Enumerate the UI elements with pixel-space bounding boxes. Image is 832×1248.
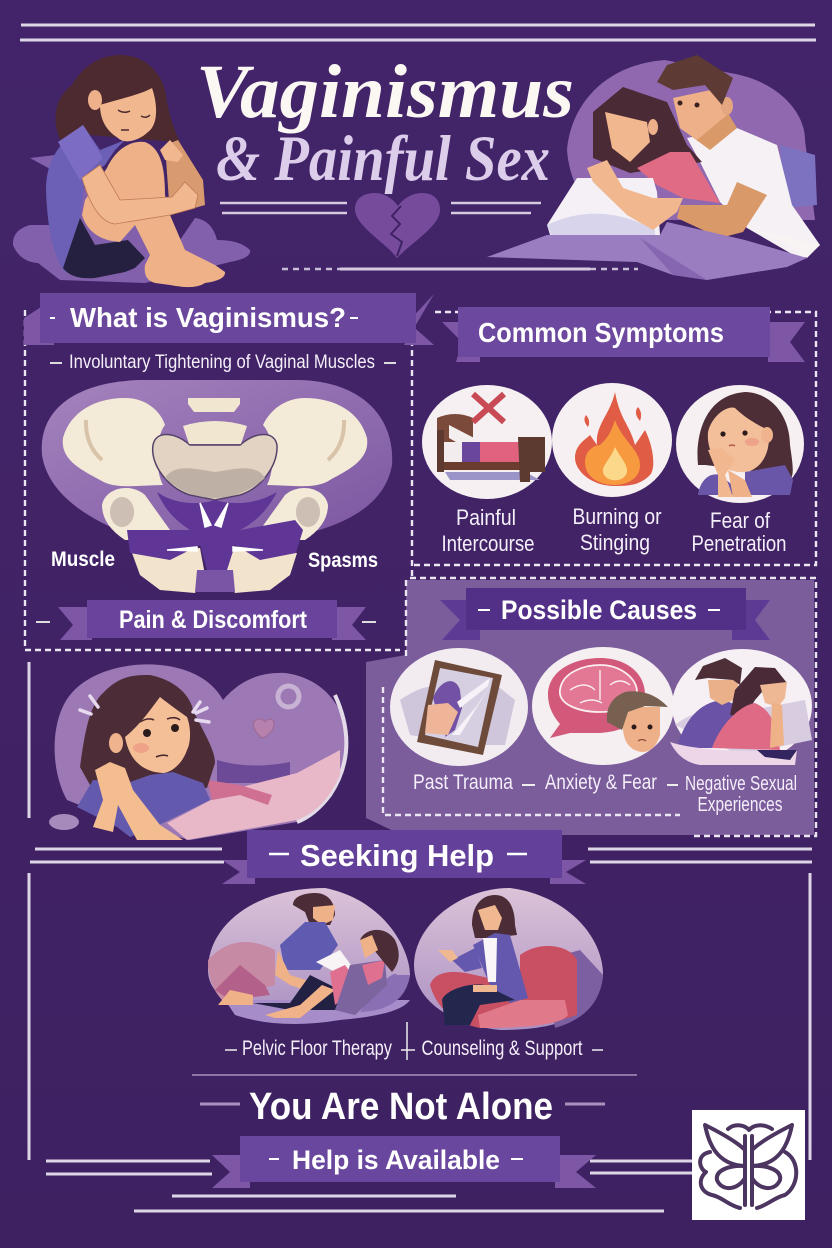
cause labels: Experiences	[698, 794, 782, 816]
ribbon: pain and discomfort	[36, 600, 376, 640]
subheading: Involuntary Tightening of Vaginal Muscles	[69, 352, 375, 373]
illustration: pelvis with muscle spasms	[42, 380, 392, 593]
cause: past trauma	[390, 648, 528, 766]
illustration: sad woman hugging knees	[13, 55, 250, 287]
ribbon: seeking help: Seeking Help	[300, 838, 494, 873]
illustration: couple in bed	[487, 55, 820, 280]
title side rules	[220, 203, 541, 213]
panel: possible causes	[366, 578, 816, 836]
ribbon: help is available: Help is Available	[292, 1145, 500, 1175]
ribbon: what is vaginismus	[24, 293, 434, 345]
dashed rule under header	[282, 268, 340, 270]
title: Vaginismus	[196, 50, 574, 134]
side rails	[29, 662, 810, 1160]
label: pelvic floor therapy	[225, 1022, 415, 1060]
cause: anxiety and fear	[532, 647, 674, 765]
ribbon: possible causes	[440, 588, 770, 640]
illustration: counseling and support	[414, 888, 603, 1030]
cause labels	[413, 771, 797, 816]
title: & Painful Sex	[216, 123, 550, 195]
symptom labels: Intercourse	[442, 531, 534, 556]
ribbon: help is available	[212, 1136, 596, 1188]
illustration: worried woman	[49, 664, 347, 840]
cause: negative sexual experiences	[670, 649, 812, 765]
cause labels: Anxiety & Fear	[545, 771, 657, 794]
label: muscle: Muscle	[51, 548, 115, 571]
cause labels: Past Trauma	[413, 771, 513, 794]
label: spasms: Spasms	[308, 549, 378, 572]
title	[196, 50, 574, 195]
top double rule	[20, 25, 816, 40]
label: pelvic floor therapy: Pelvic Floor Therapy	[242, 1037, 392, 1060]
ribbon: what is vaginismus: What is Vaginismus?	[70, 302, 346, 333]
panel: what is vaginismus	[24, 293, 434, 655]
ribbon: common symptoms: Common Symptoms	[478, 317, 724, 348]
ribbon: common symptoms	[442, 307, 805, 362]
rules beside help ribbon	[46, 1161, 692, 1211]
label: counseling and support: Counseling & Support	[422, 1037, 583, 1060]
symptom: fear of penetration	[676, 385, 804, 503]
panel: common symptoms	[414, 307, 816, 565]
ribbon: possible causes: Possible Causes	[501, 595, 697, 625]
symptom: painful intercourse	[422, 385, 552, 499]
symptom labels: Painful	[456, 505, 516, 530]
illustration: pelvic floor therapy	[208, 888, 410, 1024]
heading: you are not alone: You Are Not Alone	[249, 1086, 553, 1128]
symptom labels: Penetration	[692, 531, 786, 556]
logo: butterfly brain	[692, 1110, 805, 1220]
ribbon: seeking help	[222, 830, 586, 884]
symptom labels	[442, 504, 786, 556]
symptom labels: Fear of	[710, 508, 771, 533]
cause labels: Negative Sexual	[685, 773, 797, 795]
seeking help rules	[30, 849, 812, 862]
symptom labels: Stinging	[580, 530, 650, 555]
ribbon: pain and discomfort: Pain & Discomfort	[119, 606, 308, 634]
symptom labels: Burning or	[572, 504, 662, 529]
symptom: burning or stinging	[552, 383, 672, 497]
icon: broken heart	[355, 193, 440, 258]
